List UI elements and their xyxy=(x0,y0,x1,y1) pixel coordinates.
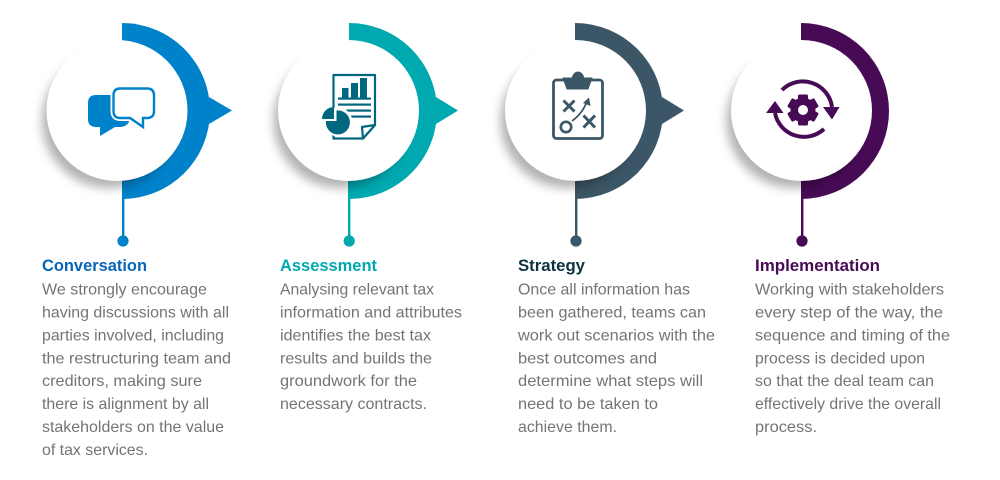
body: there is alignment by all xyxy=(42,396,209,413)
body: We strongly encourage xyxy=(42,282,207,298)
body: the restructuring team and xyxy=(42,350,231,368)
body: process. xyxy=(755,419,817,436)
step 2: Assessment graphic xyxy=(274,23,458,247)
body: groundwork for the xyxy=(280,373,417,390)
heading: Assessment xyxy=(280,257,378,275)
body: of tax services. xyxy=(42,442,148,459)
body xyxy=(755,282,950,436)
body: parties involved, including xyxy=(42,328,224,344)
body: necessary contracts. xyxy=(280,396,427,413)
body xyxy=(517,282,715,436)
body: Once all information has xyxy=(518,282,690,298)
body: Analysing relevant tax xyxy=(280,282,434,298)
body xyxy=(280,282,462,413)
icon: report document xyxy=(322,75,375,138)
body: stakeholders on the value xyxy=(42,419,224,436)
arc and pointer xyxy=(117,23,232,247)
body xyxy=(42,282,231,459)
body: work out scenarios with the xyxy=(517,328,715,344)
text block: Strategy xyxy=(517,257,715,436)
heading: Implementation xyxy=(755,257,880,275)
body: creditors, making sure xyxy=(42,373,202,390)
circle with shadow xyxy=(500,40,646,188)
circle with shadow xyxy=(42,40,188,188)
heading: Strategy xyxy=(518,257,586,275)
body: sequence and timing of the xyxy=(755,328,950,344)
circle with shadow xyxy=(274,40,419,188)
body: every step of the way, the xyxy=(755,304,943,322)
body: so that the deal team can xyxy=(755,373,934,390)
arc and pointer xyxy=(344,23,458,247)
body: results and builds the xyxy=(280,350,432,368)
step 1: Conversation graphic xyxy=(42,23,232,247)
arc and pointer xyxy=(570,23,684,247)
body: identifies the best tax xyxy=(280,328,431,344)
step 3: Strategy graphic xyxy=(500,23,684,247)
body: process is decided upon xyxy=(755,350,925,368)
body: achieve them. xyxy=(518,419,617,436)
body: been gathered, teams can xyxy=(518,304,706,322)
heading: Conversation xyxy=(42,257,147,275)
step 4: Implementation graphic xyxy=(726,23,889,247)
body: information and attributes xyxy=(280,304,462,322)
icon: speech bubbles xyxy=(88,88,154,136)
body: best outcomes and xyxy=(518,350,657,368)
circle with shadow xyxy=(726,40,872,188)
text block: Implementation xyxy=(755,257,950,436)
body: need to be taken to xyxy=(518,396,658,413)
icon: gear with rotating arrows xyxy=(766,81,840,137)
text block: Assessment xyxy=(280,257,462,413)
body: determine what steps will xyxy=(518,373,703,390)
body: effectively drive the overall xyxy=(755,396,941,413)
body: having discussions with all xyxy=(42,304,229,322)
icon: clipboard play plan xyxy=(554,72,602,138)
text block: Conversation xyxy=(42,257,231,459)
body: Working with stakeholders xyxy=(755,282,944,298)
arc xyxy=(796,23,889,247)
